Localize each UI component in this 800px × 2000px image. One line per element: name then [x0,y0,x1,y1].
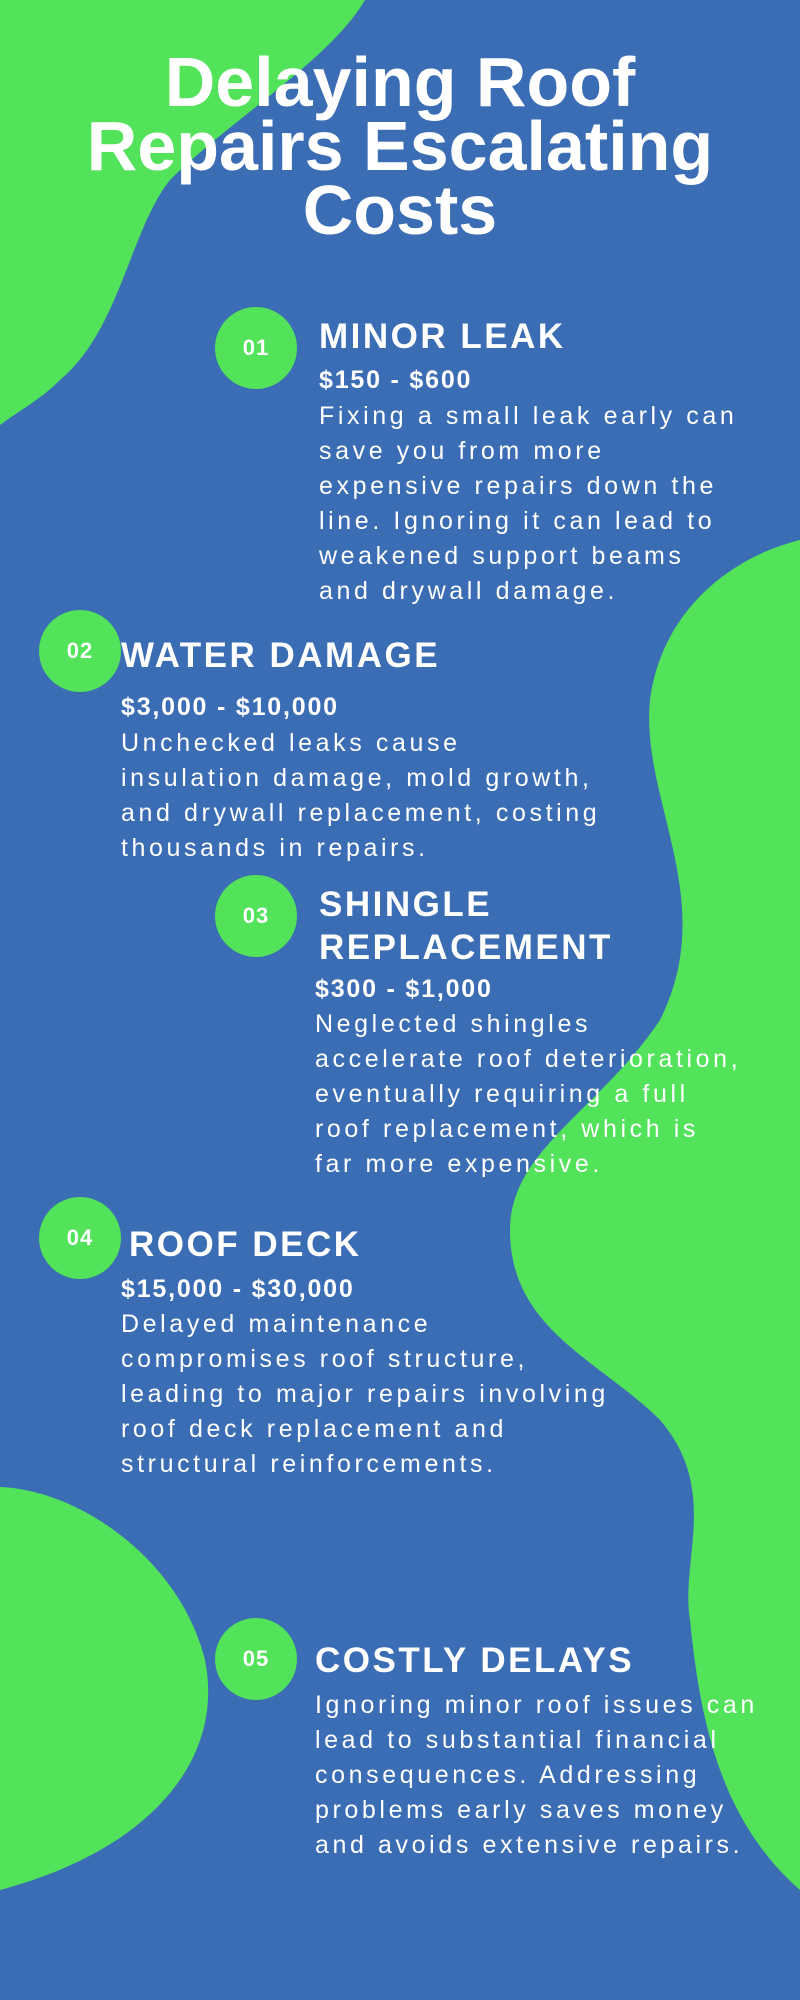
price 02: $3,000 - $10,000 [121,693,339,721]
icon: circle 02: 02 [67,638,93,663]
text 01: line. Ignoring it can lead to [319,507,715,535]
text 02: and drywall replacement, costing [121,799,600,827]
text 05: Ignoring minor roof issues can [315,1691,758,1719]
text 05: and avoids extensive repairs. [315,1831,743,1859]
title: Repairs Escalating [87,107,713,185]
icon: circle 05 [215,1618,297,1700]
icon: circle 05: 05 [243,1646,269,1671]
text 01: Fixing a small leak early can [319,402,737,430]
text 05: lead to substantial financial [315,1726,720,1754]
text 02: thousands in repairs. [121,834,429,862]
text 05 [315,1691,758,1859]
text 05: consequences. Addressing [315,1761,700,1789]
icon: circle 03: 03 [243,903,269,928]
text 04: leading to major repairs involving [121,1380,609,1408]
text 03: accelerate roof deterioration, [315,1045,741,1073]
item 04 [39,1197,609,1478]
heading 03: SHINGLE [319,885,492,924]
text 01: weakened support beams [319,542,684,570]
price 03: $300 - $1,000 [315,975,493,1003]
icon: circle 03 [215,875,297,957]
item 05 [215,1618,758,1859]
text 04 [121,1310,609,1478]
heading 03: REPLACEMENT [319,928,613,967]
item 01 [215,307,737,605]
text 01: expensive repairs down the [319,472,717,500]
icon: circle 02 [39,610,121,692]
text 04: compromises roof structure, [121,1345,528,1373]
price 04: $15,000 - $30,000 [121,1275,355,1303]
heading 03 [319,885,613,967]
text 03: roof replacement, which is [315,1115,699,1143]
text 02: insulation damage, mold growth, [121,764,593,792]
text 03: far more expensive. [315,1150,603,1178]
text 02: Unchecked leaks cause [121,729,461,757]
text 01: save you from more [319,437,605,465]
text 04: roof deck replacement and [121,1415,507,1443]
text 03: eventually requiring a full [315,1080,689,1108]
item 03 [215,875,741,1178]
text 04: Delayed maintenance [121,1310,431,1338]
heading 02: WATER DAMAGE [121,636,440,675]
title: Costs [303,171,497,249]
heading 05: COSTLY DELAYS [315,1641,634,1680]
title: Delaying Roof [165,43,635,121]
item 02 [39,610,600,862]
text 01 [319,402,737,605]
text 01: and drywall damage. [319,577,618,605]
text 03 [315,1010,741,1178]
icon: circle 04: 04 [67,1225,93,1250]
title [87,43,713,249]
heading 01: MINOR LEAK [319,317,566,356]
heading 04: ROOF DECK [129,1225,362,1264]
text 05: problems early saves money [315,1796,727,1824]
text 03: Neglected shingles [315,1010,591,1038]
icon: circle 01: 01 [243,335,269,360]
text 04: structural reinforcements. [121,1450,497,1478]
price 01: $150 - $600 [319,366,472,394]
text 02 [121,729,600,862]
icon: circle 01 [215,307,297,389]
icon: circle 04 [39,1197,121,1279]
